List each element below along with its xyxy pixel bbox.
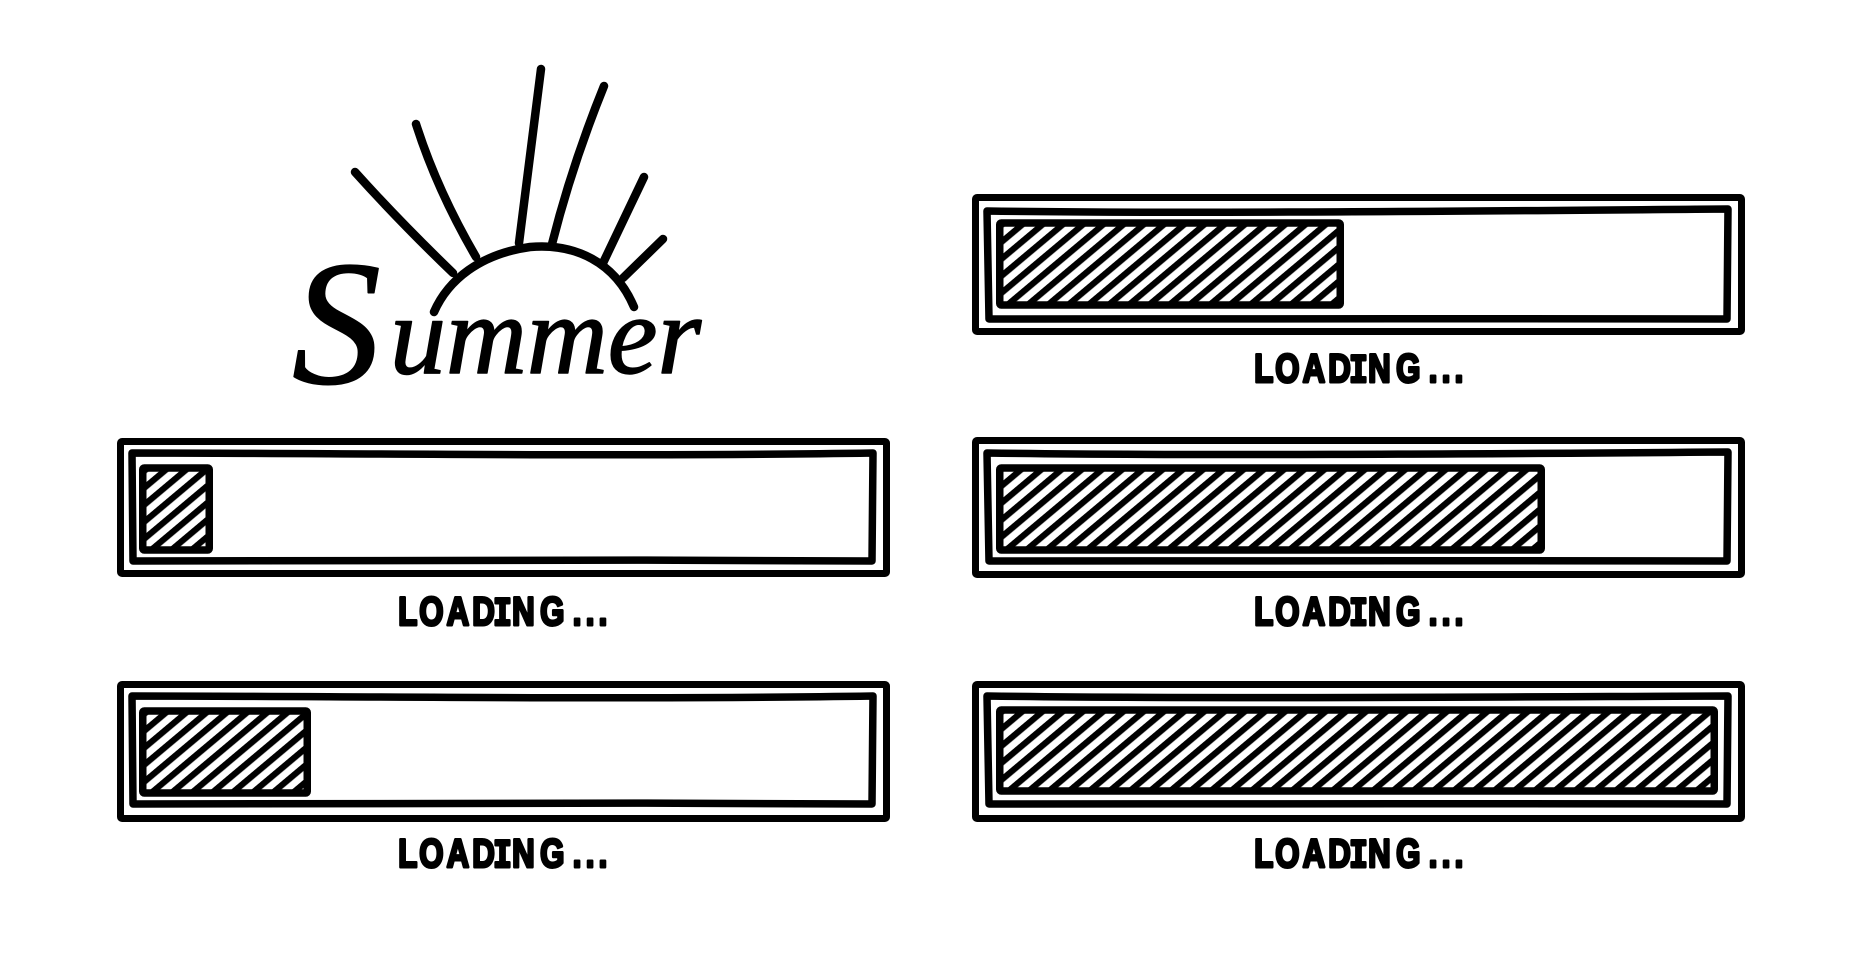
label: loading text: I: [493, 834, 512, 879]
script word: Summer: ummer: [390, 274, 701, 398]
bar inner outline: [132, 696, 873, 804]
panel: loading bar, top right: [976, 198, 1742, 332]
label: loading text: LOAD: [398, 589, 495, 634]
panel: loading bar, middle left: [120, 442, 886, 574]
bar inner outline: [987, 696, 1728, 804]
label: loading text: NG...: [512, 589, 607, 634]
panel: loading bar, bottom left: [120, 684, 886, 818]
progress fill: [1000, 710, 1714, 791]
progress fill: [143, 711, 307, 793]
label: loading text: I: [1349, 592, 1368, 637]
label: loading text: NG...: [1368, 831, 1463, 876]
icon: sun rays and arc: [355, 69, 663, 312]
bar frame: [120, 684, 886, 818]
progress fill: [1000, 223, 1340, 305]
bar inner outline: [132, 453, 873, 561]
progress fill: [143, 468, 209, 550]
label: loading text: I: [1349, 349, 1368, 394]
panel: loading bar, middle right: [976, 440, 1742, 574]
label: loading text: NG...: [512, 831, 607, 876]
label: loading text: NG...: [1368, 589, 1463, 634]
bar frame: [976, 198, 1742, 332]
bar frame: [120, 442, 886, 574]
panel: loading bar, bottom right: [976, 684, 1742, 818]
bar inner outline: [987, 452, 1728, 561]
bar inner outline: [987, 209, 1728, 319]
summer sun logo: [292, 69, 701, 422]
label: loading text: I: [493, 592, 512, 637]
bar frame: [976, 684, 1742, 818]
script word: Summer: S: [292, 224, 381, 422]
label: loading text: I: [1349, 834, 1368, 879]
bar frame: [976, 440, 1742, 574]
label: loading text: LOAD: [1254, 346, 1351, 391]
progress fill: [1000, 468, 1541, 550]
label: loading text: LOAD: [1254, 589, 1351, 634]
label: loading text: LOAD: [1254, 831, 1351, 876]
label: loading text: NG...: [1368, 346, 1463, 391]
label: loading text: LOAD: [398, 831, 495, 876]
